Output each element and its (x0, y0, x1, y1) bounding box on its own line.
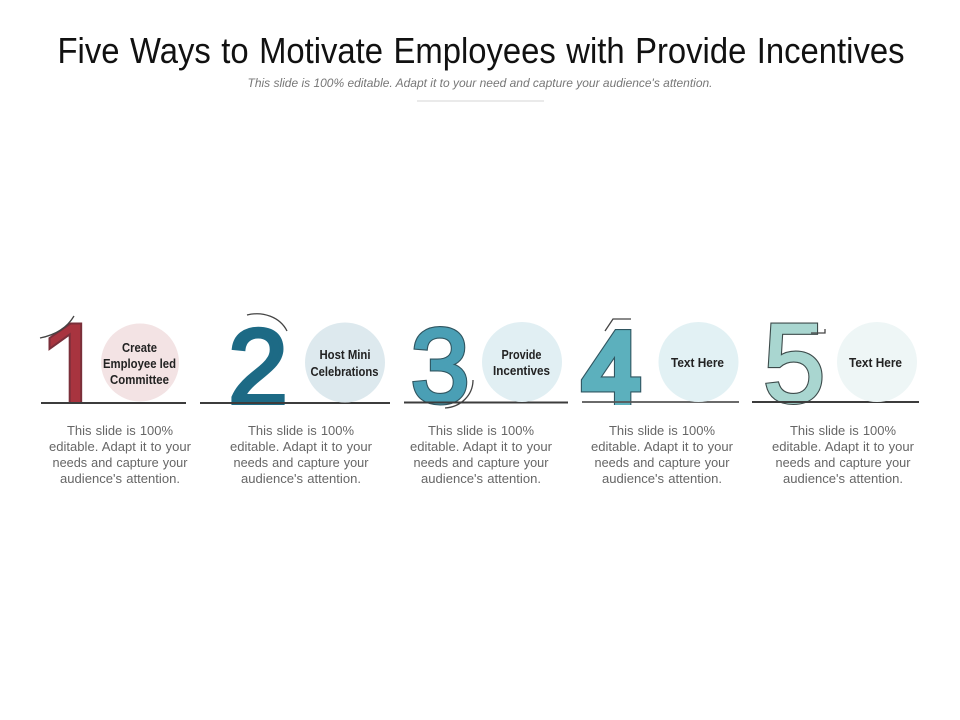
arc accent 2 (247, 314, 287, 331)
description 2: editable. Adapt it to your (230, 439, 373, 454)
description 3: needs and capture your (414, 455, 549, 470)
baseline 1 (41, 402, 186, 404)
circle 3 (482, 322, 562, 402)
label 2: Celebrations (310, 364, 378, 379)
description 5: audience's attention. (783, 471, 903, 486)
description 2: This slide is 100% (248, 423, 354, 438)
description 1: editable. Adapt it to your (49, 439, 192, 454)
description 1 (49, 423, 192, 486)
label 1: Employee led (103, 356, 176, 371)
description 3 (410, 423, 553, 486)
baseline 3 (404, 402, 568, 404)
description 4: editable. Adapt it to your (591, 439, 734, 454)
baseline 4 (582, 401, 739, 403)
description 3: editable. Adapt it to your (410, 439, 553, 454)
arc accent 5 (811, 329, 825, 333)
description 1: audience's attention. (60, 471, 180, 486)
number 3: 3 (411, 308, 469, 425)
description 2: needs and capture your (234, 455, 369, 470)
baseline 2 (200, 402, 390, 404)
number 3 (412, 326, 468, 406)
step 4 (582, 312, 739, 486)
label 2: Host Mini (320, 347, 370, 362)
label 3: Provide (502, 347, 542, 362)
label 1 (103, 340, 176, 387)
description 3: audience's attention. (421, 471, 541, 486)
arc accent 3 (445, 380, 473, 408)
label 3 (493, 347, 550, 378)
description 5 (772, 423, 915, 486)
description 4 (591, 423, 734, 486)
number 4: 4 (583, 312, 640, 426)
arc accent 1 (40, 316, 74, 338)
number 4: 4 (583, 312, 640, 426)
description 1: This slide is 100% (67, 423, 173, 438)
description 2: audience's attention. (241, 471, 361, 486)
description 5: This slide is 100% (790, 423, 896, 438)
title: Five Ways to Motivate Employees with Provide Incentives (58, 30, 904, 71)
step 2 (200, 306, 390, 486)
description 4: needs and capture your (594, 455, 730, 470)
step 3 (404, 308, 568, 486)
number 4 (580, 329, 642, 405)
description 4: This slide is 100% (609, 423, 715, 438)
label 1: Create (122, 340, 157, 355)
number 5: 5 (763, 301, 825, 426)
step 1 (40, 316, 191, 483)
number 5 (765, 322, 823, 405)
number 5: 5 (763, 301, 825, 426)
circle 2 (305, 322, 385, 402)
number 3: 3 (411, 308, 469, 425)
step 5 (752, 322, 919, 483)
arc accent 4 (605, 319, 631, 331)
label 1: Committee (110, 372, 169, 387)
description 3: This slide is 100% (428, 423, 534, 438)
number 2: 2 (228, 306, 288, 427)
label 2 (310, 347, 378, 379)
description 2 (230, 423, 373, 486)
label 3: Incentives (493, 363, 550, 378)
circle 4 (658, 322, 738, 402)
subtitle: This slide is 100% editable. Adapt it to your need and capture your audience's attention. (248, 76, 712, 90)
description 1: needs and capture your (52, 455, 188, 470)
circle 5 (837, 322, 917, 402)
number 1: 1 (37, 295, 109, 441)
circle 1 (101, 324, 179, 402)
description 5: needs and capture your (776, 455, 911, 470)
description 4: audience's attention. (602, 471, 722, 486)
baseline 5 (752, 401, 919, 403)
label 5: Text Here (849, 355, 902, 370)
description 5: editable. Adapt it to your (772, 439, 915, 454)
label 4: Text Here (671, 355, 724, 370)
